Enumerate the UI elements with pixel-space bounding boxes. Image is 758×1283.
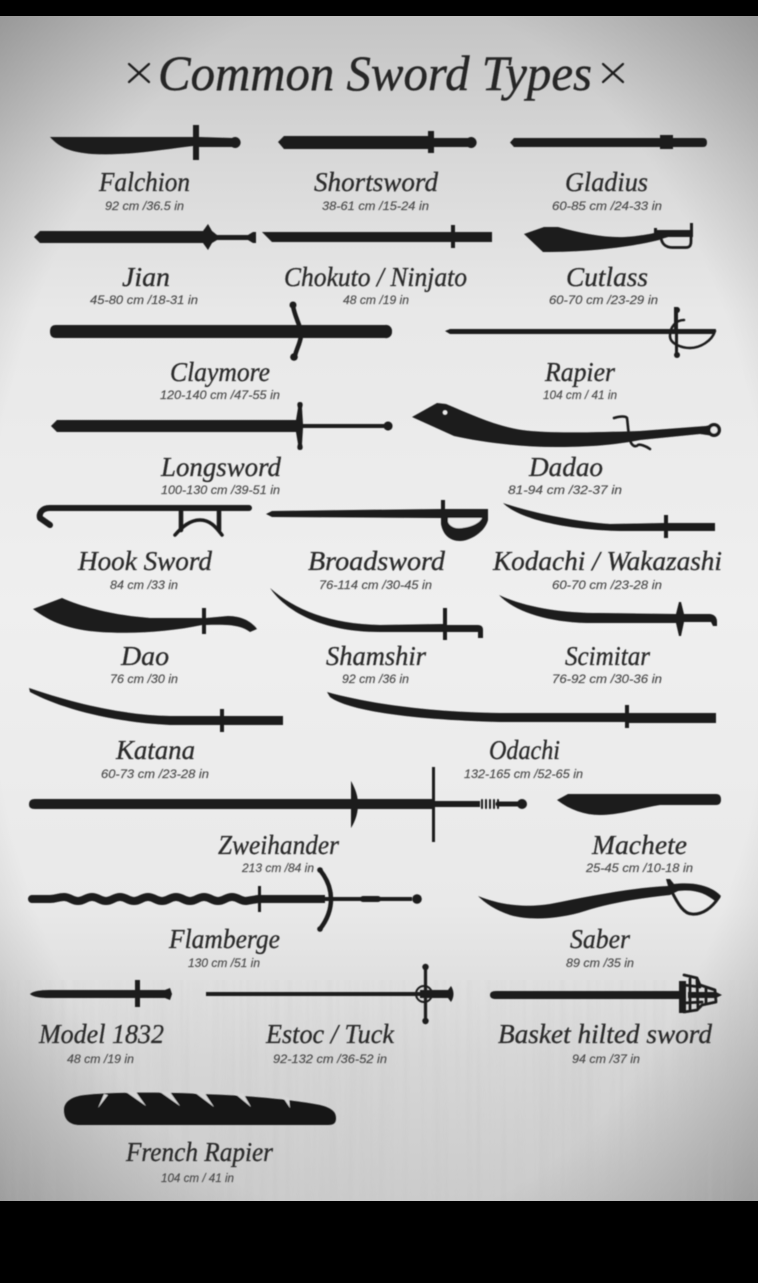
panel: Machete: [557, 794, 721, 875]
size: 92 cm /36.5 in: [105, 201, 184, 213]
size: 132-165 cm /52-65 in: [464, 769, 583, 781]
icon: basket hilted sword: [490, 975, 722, 1013]
name: Hook Sword: [77, 546, 212, 576]
panel: Chokuto / Ninjato: [262, 225, 492, 307]
name: Dao: [120, 641, 169, 671]
panel: Jian: [34, 224, 256, 307]
panel: Rapier: [445, 307, 716, 402]
icon: scimitar: [499, 595, 717, 636]
size: 60-70 cm /23-28 in: [552, 580, 662, 592]
name: Chokuto / Ninjato: [284, 262, 467, 292]
name: Estoc / Tuck: [265, 1019, 395, 1049]
panel: Broadsword: [266, 500, 488, 592]
icon: falchion: [50, 125, 241, 160]
panel: Falchion: [50, 125, 241, 213]
icon: shamshir: [270, 588, 483, 640]
icon: model 1832: [30, 980, 172, 1007]
icon: right cross: [603, 64, 623, 82]
name: Dadao: [528, 452, 603, 482]
panel: Dao: [33, 598, 257, 686]
icon: shortsword: [278, 131, 477, 153]
size: 84 cm /33 in: [110, 580, 178, 592]
icon: zweihander: [29, 767, 527, 842]
panel: Zweihander: [29, 767, 527, 875]
panel: Odachi: [327, 692, 716, 781]
name: Shamshir: [326, 641, 426, 671]
panel: Estoc / Tuck: [206, 964, 454, 1066]
panel: Longsword: [51, 402, 393, 497]
panel: Dadao: [412, 403, 721, 497]
icon: left cross: [129, 64, 149, 82]
size: 81-94 cm /32-37 in: [508, 485, 622, 497]
size: 92-132 cm /36-52 in: [273, 1054, 387, 1066]
name: Model 1832: [38, 1019, 164, 1049]
size: 25-45 cm /10-18 in: [585, 863, 693, 875]
size: 60-73 cm /23-28 in: [101, 769, 209, 781]
name: Kodachi / Wakazashi: [492, 546, 722, 576]
name: Scimitar: [565, 641, 650, 671]
name: Shortsword: [314, 167, 439, 197]
size: 76 cm /30 in: [110, 674, 178, 686]
panel: French Rapier: [64, 1092, 336, 1185]
size: 92 cm /36 in: [342, 674, 409, 686]
size: 130 cm /51 in: [188, 958, 260, 970]
size: 45-80 cm /18-31 in: [90, 295, 198, 307]
size: 48 cm /19 in: [343, 295, 409, 307]
size: 48 cm /19 in: [67, 1054, 134, 1066]
panel: Basket hilted sword: [490, 975, 722, 1066]
name: Basket hilted sword: [498, 1019, 712, 1049]
icon: claymore: [50, 302, 392, 361]
panel: Katana: [29, 688, 283, 781]
panel: Kodachi / Wakazashi: [492, 503, 722, 592]
icon: hook sword: [40, 508, 249, 535]
name: Falchion: [98, 167, 190, 197]
panel: Hook Sword: [40, 508, 249, 592]
name: Odachi: [489, 735, 560, 765]
size: 100-130 cm /39-51 in: [161, 485, 280, 497]
size: 104 cm / 41 in: [543, 390, 617, 402]
title: [129, 45, 623, 101]
icon: estoc: [206, 964, 454, 1024]
name: Machete: [591, 830, 687, 860]
panel: Cutlass: [524, 223, 693, 307]
name: Rapier: [544, 357, 615, 387]
size: 60-85 cm /24-33 in: [552, 201, 662, 213]
icon: machete: [557, 794, 721, 815]
size: 120-140 cm /47-55 in: [160, 390, 280, 402]
name: Saber: [570, 924, 630, 954]
name: Flamberge: [168, 924, 280, 954]
icon: saber: [478, 879, 721, 918]
name: French Rapier: [125, 1137, 273, 1167]
size: 76-92 cm /30-36 in: [552, 674, 662, 686]
panel: Saber: [478, 879, 721, 970]
panel: Scimitar: [499, 595, 717, 686]
name: Cutlass: [566, 262, 648, 292]
icon: dadao: [412, 403, 721, 449]
panel: Gladius: [510, 135, 707, 213]
icon: dao: [33, 598, 257, 634]
name: Katana: [115, 735, 195, 765]
name: Gladius: [565, 167, 648, 197]
icon: baguette: [64, 1092, 336, 1125]
icon: flamberge: [32, 867, 422, 932]
panel: Shortsword: [278, 131, 477, 213]
size: 213 cm /84 in: [241, 863, 314, 875]
size: 38-61 cm /15-24 in: [322, 201, 429, 213]
name: Zweihander: [218, 830, 339, 860]
size: 89 cm /35 in: [566, 958, 634, 970]
size: 104 cm / 41 in: [161, 1173, 234, 1185]
icon: katana: [29, 688, 283, 732]
icon: jian: [34, 224, 256, 250]
name: Broadsword: [308, 546, 446, 576]
icon: kodachi: [503, 503, 715, 538]
name: Jian: [122, 262, 170, 292]
name: Longsword: [160, 452, 281, 482]
name: Claymore: [170, 357, 270, 387]
icon: broadsword: [266, 500, 488, 541]
icon: gladius: [510, 135, 707, 149]
panel: Shamshir: [270, 588, 483, 686]
title text: Common Sword Types: [158, 45, 592, 101]
icon: chokuto: [262, 225, 492, 248]
size: 60-70 cm /23-29 in: [549, 295, 658, 307]
icon: rapier: [445, 307, 716, 358]
panel: Claymore: [50, 302, 392, 402]
panel: Model 1832: [30, 980, 172, 1066]
icon: cutlass: [524, 223, 693, 252]
icon: longsword: [51, 402, 393, 450]
size: 94 cm /37 in: [572, 1054, 640, 1066]
icon: odachi: [327, 692, 716, 728]
size: 76-114 cm /30-45 in: [319, 580, 432, 592]
panel: Flamberge: [32, 867, 422, 970]
